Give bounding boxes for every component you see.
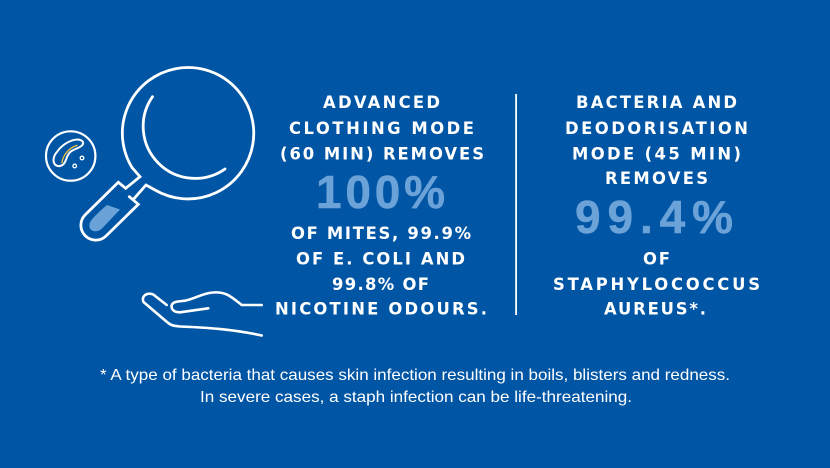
description: staphylococcus aureus bbox=[553, 250, 760, 318]
heading: bacteria and deodorisation mode: BACTERIA AND bbox=[576, 93, 737, 112]
text block: bacteria and deodorisation mode bbox=[553, 93, 760, 318]
heading: advanced clothing mode bbox=[280, 93, 484, 164]
footnote: * A type of bacteria that causes skin infection resulting in boils, blisters and redness. bbox=[100, 367, 730, 384]
description: mites, E. coli, nicotine bbox=[275, 224, 487, 318]
footnote bbox=[100, 367, 730, 406]
heading: bacteria and deodorisation mode: MODE (45 MIN) bbox=[572, 144, 741, 164]
heading: bacteria and deodorisation mode: DEODORISATION bbox=[565, 119, 748, 138]
footnote: In severe cases, a staph infection can be life-threatening. bbox=[200, 389, 632, 406]
icon: bacteria in circle bbox=[46, 131, 95, 181]
icon: open hand bbox=[143, 292, 262, 336]
stat: 100%: 100% bbox=[316, 166, 445, 218]
icon: magnifying glass bbox=[81, 68, 254, 240]
description: mites, E. coli, nicotine: OF E. COLI AND bbox=[296, 250, 465, 268]
heading: bacteria and deodorisation mode bbox=[565, 93, 748, 188]
description: mites, E. coli, nicotine: OF MITES, 99.9% bbox=[291, 224, 471, 243]
heading: bacteria and deodorisation mode: REMOVES bbox=[605, 169, 708, 188]
stat: 99.4%: 99.4% bbox=[575, 191, 733, 243]
heading: advanced clothing mode: CLOTHING MODE bbox=[289, 119, 474, 138]
description: mites, E. coli, nicotine: 99.8% OF bbox=[332, 275, 429, 294]
description: staphylococcus aureus: OF bbox=[643, 250, 670, 268]
description: staphylococcus aureus: AUREUS*. bbox=[604, 300, 706, 318]
heading: advanced clothing mode: ADVANCED bbox=[323, 93, 440, 112]
text block: advanced clothing mode bbox=[275, 93, 487, 318]
description: staphylococcus aureus: STAPHYLOCOCCUS bbox=[553, 275, 760, 294]
heading: advanced clothing mode: (60 MIN) REMOVES bbox=[280, 144, 484, 164]
description: mites, E. coli, nicotine: NICOTINE ODOURS. bbox=[275, 300, 487, 318]
